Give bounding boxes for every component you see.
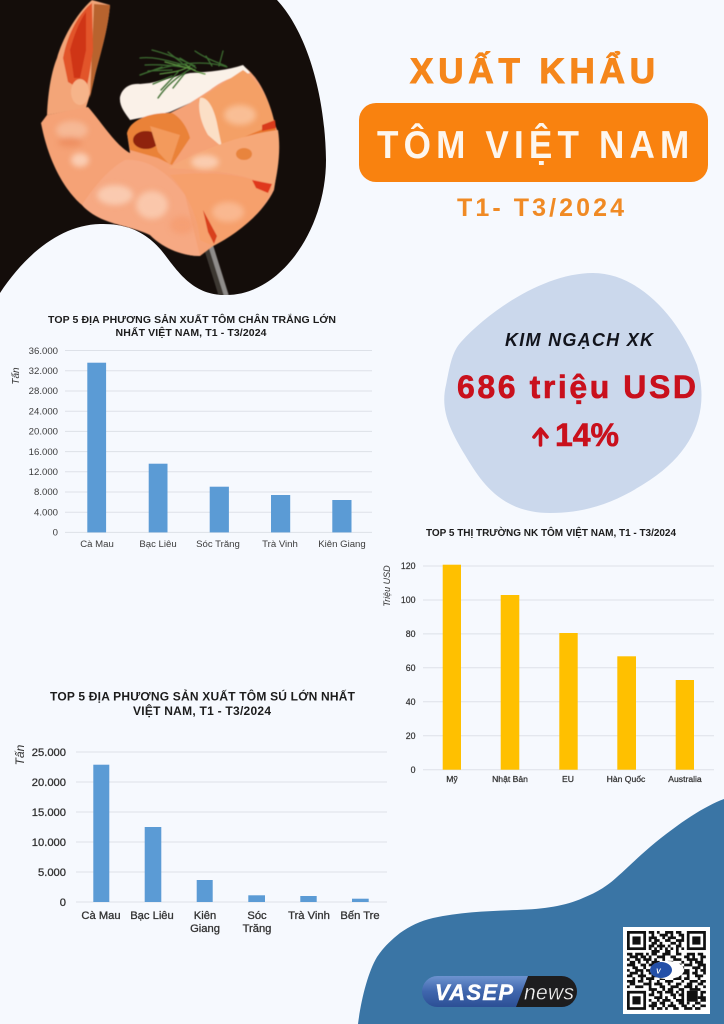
QR code [623, 927, 710, 1014]
x axis labels: Sóc [247, 910, 267, 922]
y axis labels: 20 [406, 731, 416, 741]
period: T1- T3/2024 [457, 194, 624, 222]
x axis labels: Sóc Trăng [196, 539, 240, 550]
logo: VASEP news: news [524, 982, 574, 1004]
y axis labels [29, 346, 58, 539]
chart title: TOP 5 THỊ TRƯỜNG NK TÔM VIỆT NAM, T1 - T3/2024 [426, 526, 676, 539]
y axis labels: 0 [60, 897, 66, 909]
y axis labels [401, 561, 416, 775]
banner: TÔM VIỆT NAM [359, 103, 708, 182]
chart title: TOP 5 ĐỊA PHƯƠNG SẢN XUẤT TÔM SÚ LỚN NHẤT [50, 688, 356, 704]
y axis labels: 0 [53, 528, 58, 539]
chart title: VIỆT NAM, T1 - T3/2024 [133, 703, 271, 718]
blue corner shape [358, 799, 724, 1024]
y axis labels: 15.000 [32, 807, 66, 819]
y axis labels: 20.000 [32, 777, 66, 789]
title: XUẤT KHẨU: XUẤT KHẨU [410, 51, 655, 91]
x axis labels: Giang [190, 923, 220, 935]
y axis unit: Tấn [13, 744, 27, 765]
y axis labels: 8.000 [34, 487, 58, 498]
x axis labels: Trà Vinh [288, 910, 330, 922]
x axis labels: Nhật Bản [492, 774, 528, 784]
bars [443, 565, 694, 770]
x axis labels: Cà Mau [81, 910, 121, 922]
photo: shrimp on black [0, 0, 340, 300]
y axis labels: 60 [406, 663, 416, 673]
x axis labels: Cà Mau [80, 539, 114, 550]
value: 686 million USD: 686 triệu USD [457, 369, 696, 405]
icon: shrimp [41, 0, 279, 256]
icon: dill sprig [140, 50, 227, 98]
y axis labels: 24.000 [29, 406, 58, 417]
bars [93, 765, 369, 902]
panel: export value blob [444, 273, 702, 513]
x axis labels: Australia [668, 774, 702, 784]
icon: fork [205, 246, 230, 295]
y axis labels: 36.000 [29, 346, 58, 357]
x axis labels: Kiên [194, 910, 216, 922]
y axis labels: 12.000 [29, 467, 58, 478]
chart title [50, 688, 356, 718]
x axis labels [80, 539, 366, 550]
value: growth 14%: 14% [555, 417, 619, 453]
y axis labels: 16.000 [29, 447, 58, 458]
chart title: NHẤT VIỆT NAM, T1 - T3/2024 [116, 326, 267, 339]
x axis labels: Mỹ [446, 774, 458, 784]
shrimp highlights [56, 105, 256, 234]
x axis labels: Bến Tre [340, 910, 380, 922]
y axis labels [32, 747, 66, 909]
chart title [48, 313, 336, 339]
x axis labels: Trà Vinh [262, 539, 298, 550]
y axis labels: 10.000 [32, 837, 66, 849]
y axis labels: 28.000 [29, 386, 58, 397]
y axis labels: 5.000 [38, 867, 66, 879]
y axis labels: 4.000 [34, 507, 58, 518]
QR centre logo: V [656, 968, 662, 976]
y axis labels: 32.000 [29, 366, 58, 377]
x axis labels [81, 910, 380, 935]
y axis labels: 20.000 [29, 427, 58, 438]
x axis labels: EU [562, 774, 574, 784]
y axis unit: Tấn [10, 367, 22, 385]
label: export value: KIM NGẠCH XK [505, 330, 655, 350]
chart title: TOP 5 ĐỊA PHƯƠNG SẢN XUẤT TÔM CHÂN TRẮNG LỚN [48, 313, 336, 326]
x axis labels: Hàn Quốc [607, 774, 646, 784]
chart: top 5 import markets [382, 526, 714, 784]
logo: VASEP news [422, 976, 577, 1007]
banner: TÔM VIỆT NAM: TÔM VIỆT NAM [377, 122, 689, 166]
y axis labels: 120 [401, 561, 416, 571]
y axis labels: 40 [406, 697, 416, 707]
y axis labels: 80 [406, 629, 416, 639]
y axis labels: 100 [401, 595, 416, 605]
x axis labels: Bạc Liêu [130, 910, 174, 922]
x axis labels: Bạc Liêu [139, 539, 177, 550]
x axis labels [446, 774, 702, 784]
logo: VASEP news: VASEP [435, 980, 513, 1005]
y axis labels: 0 [411, 765, 416, 775]
x axis labels: Trăng [243, 923, 271, 935]
chart: top 5 white-leg shrimp provinces [10, 313, 372, 550]
x axis labels: Kiên Giang [318, 539, 366, 550]
y axis labels: 25.000 [32, 747, 66, 759]
bars [87, 363, 352, 532]
y axis unit: Triệu USD [382, 565, 392, 607]
chart: top 5 black tiger shrimp provinces [13, 688, 387, 935]
